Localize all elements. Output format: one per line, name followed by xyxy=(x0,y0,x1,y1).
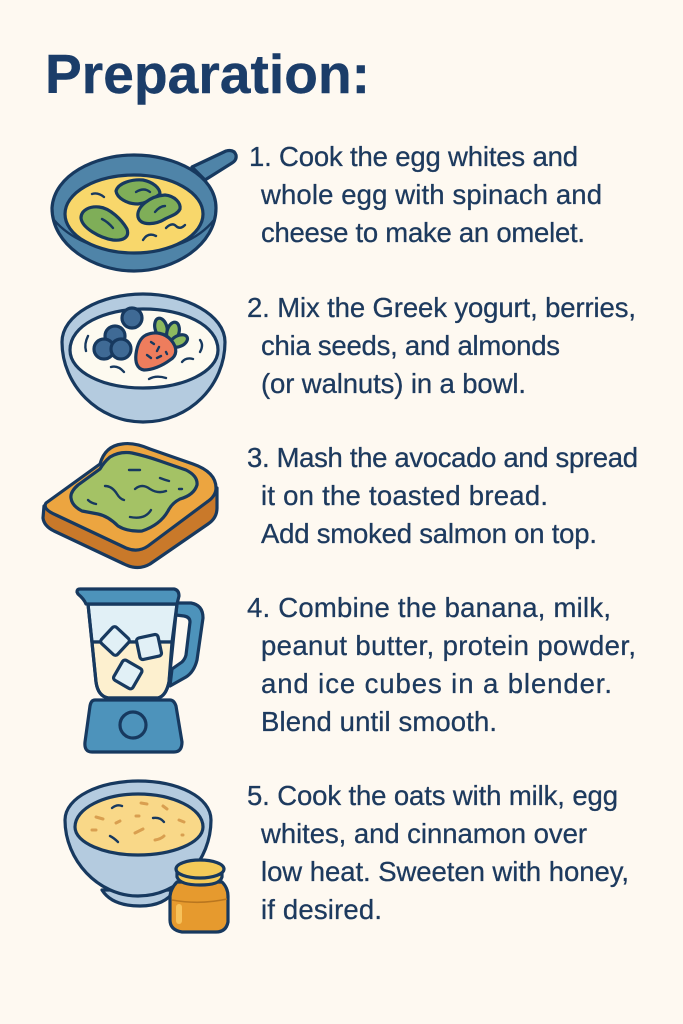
step 5 xyxy=(65,780,629,932)
text: step 5 xyxy=(247,780,629,925)
text: step 3 xyxy=(247,442,638,549)
text: step 5: if desired. xyxy=(261,894,382,925)
icon: avocado toast xyxy=(43,444,217,568)
text: step 3: it on the toasted bread. xyxy=(261,480,548,511)
text: step 1: 1. Cook the egg whites and xyxy=(249,141,578,172)
title: Preparation: xyxy=(45,43,370,105)
icon: honey jar xyxy=(170,860,228,932)
text: step 5: 5. Cook the oats with milk, egg xyxy=(247,780,618,811)
text: step 3: 3. Mash the avocado and spread xyxy=(247,442,638,473)
step 1 xyxy=(52,141,602,271)
text: step 2: 2. Mix the Greek yogurt, berries, xyxy=(247,292,636,323)
step 2 xyxy=(62,292,636,422)
step 3 xyxy=(43,442,638,568)
icon: frying pan with omelet xyxy=(52,150,236,271)
text: step 2 xyxy=(247,292,636,399)
text: step 4: and ice cubes in a blender. xyxy=(261,668,612,699)
icon: blender xyxy=(77,589,203,752)
text: step 4: 4. Combine the banana, milk, xyxy=(247,592,611,623)
icon: oatmeal bowl xyxy=(65,781,211,906)
text: step 2: (or walnuts) in a bowl. xyxy=(261,368,526,399)
text: step 5: low heat. Sweeten with honey, xyxy=(261,856,629,887)
text: step 1: cheese to make an omelet. xyxy=(261,217,585,248)
text: step 4: peanut butter, protein powder, xyxy=(261,630,636,661)
text: step 2: chia seeds, and almonds xyxy=(261,330,560,361)
text: step 1: whole egg with spinach and xyxy=(260,179,602,210)
step 4 xyxy=(77,589,636,752)
text: step 4 xyxy=(247,592,636,737)
text: step 1 xyxy=(249,141,602,248)
text: step 3: Add smoked salmon on top. xyxy=(261,518,597,549)
icon: yogurt bowl with berries xyxy=(62,294,225,422)
text: step 4: Blend until smooth. xyxy=(261,706,497,737)
text: step 5: whites, and cinnamon over xyxy=(260,818,587,849)
